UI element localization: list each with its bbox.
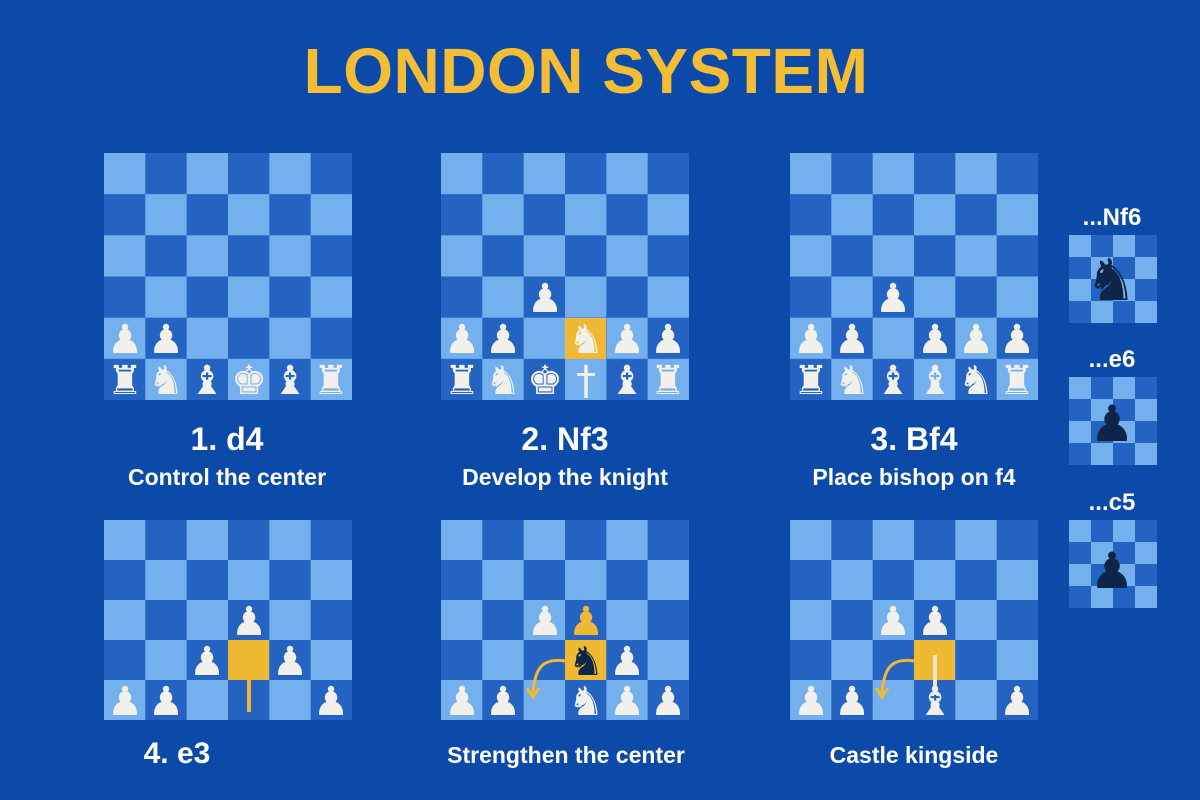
board 1: d4 bbox=[104, 153, 352, 404]
board 1: d4: ♝ bbox=[272, 358, 308, 404]
board 2: Nf3: ♟ bbox=[444, 317, 480, 363]
board 4: e3: ♟ bbox=[313, 679, 349, 725]
board 6: castle: ♝ bbox=[917, 679, 953, 725]
board 5: strengthen: ♟ bbox=[527, 599, 563, 645]
caption: castle kingside: Castle kingside bbox=[830, 742, 998, 768]
board 5: strengthen: ♟ bbox=[485, 679, 521, 725]
board 4: e3: ♟ bbox=[148, 679, 184, 725]
board 3: Bf4: ♟ bbox=[958, 317, 994, 363]
board 2: Nf3: ♟ bbox=[609, 317, 645, 363]
board 3: Bf4: ♝ bbox=[917, 358, 953, 404]
board 5: strengthen: ♞ bbox=[568, 679, 604, 725]
board 3: Bf4: ♞ bbox=[834, 358, 870, 404]
caption: develop the knight: Develop the knight bbox=[462, 464, 668, 490]
board 6: castle: ♟ bbox=[875, 599, 911, 645]
board 2: Nf3: ♝ bbox=[609, 358, 645, 404]
side: e6 bbox=[1069, 346, 1157, 465]
board 4: e3: ♟ bbox=[189, 639, 225, 685]
board 2: Nf3: ♞ bbox=[485, 358, 521, 404]
board 2: Nf3 bbox=[441, 153, 689, 404]
title: LONDON SYSTEM bbox=[304, 35, 868, 107]
board 3: Bf4: ♝ bbox=[875, 358, 911, 404]
label: 1. d4: 1. d4 bbox=[191, 421, 264, 457]
board 1: d4: ♝ bbox=[189, 358, 225, 404]
board 6: castle: ♟ bbox=[793, 679, 829, 725]
board 5: strengthen bbox=[441, 520, 689, 725]
board 4: e3: ♟ bbox=[272, 639, 308, 685]
arrow bbox=[882, 660, 914, 693]
caption: strengthen the center: Strengthen the center bbox=[447, 742, 685, 768]
board 4: e3: ♟ bbox=[107, 679, 143, 725]
board 3: Bf4: ♟ bbox=[999, 317, 1035, 363]
side: e6: ♟ bbox=[1090, 395, 1134, 453]
board 1: d4: ♞ bbox=[148, 358, 184, 404]
caption: place bishop: Place bishop on f4 bbox=[812, 464, 1016, 490]
board 3: Bf4: ♟ bbox=[834, 317, 870, 363]
board 4: e3: ♟ bbox=[231, 599, 267, 645]
board 2: Nf3: ♟ bbox=[485, 317, 521, 363]
label: 2. Nf3: 2. Nf3 bbox=[521, 421, 609, 457]
board 3: Bf4: ♟ bbox=[875, 276, 911, 322]
board 5: strengthen: ♟ bbox=[609, 639, 645, 685]
board 5: strengthen: ♟ bbox=[444, 679, 480, 725]
side: c5 bbox=[1069, 489, 1157, 608]
board 3: Bf4: ♜ bbox=[999, 358, 1035, 404]
board 3: Bf4: ♟ bbox=[793, 317, 829, 363]
board 3: Bf4: ♞ bbox=[958, 358, 994, 404]
board 2: Nf3: ♞ bbox=[568, 317, 604, 363]
side: Nf6: ...Nf6 bbox=[1083, 204, 1141, 231]
board 1: d4: ♟ bbox=[148, 317, 184, 363]
board 2: Nf3: ♚ bbox=[527, 358, 563, 404]
board 3: Bf4: ♜ bbox=[793, 358, 829, 404]
side: Nf6 bbox=[1069, 204, 1157, 323]
board 2: Nf3: † bbox=[576, 358, 596, 404]
board 5: strengthen: ♞ bbox=[568, 639, 604, 685]
board 6: castle bbox=[790, 520, 1038, 725]
label: 4. e3: 4. e3 bbox=[144, 737, 210, 770]
board 6: castle: ♟ bbox=[999, 679, 1035, 725]
board 1: d4: ♟ bbox=[107, 317, 143, 363]
side: c5: ...c5 bbox=[1089, 489, 1135, 516]
side: e6: ...e6 bbox=[1089, 346, 1135, 373]
board 2: Nf3: ♜ bbox=[650, 358, 686, 404]
board 2: Nf3: ♜ bbox=[444, 358, 480, 404]
board 1: d4: ♜ bbox=[107, 358, 143, 404]
board 2: Nf3: ♟ bbox=[650, 317, 686, 363]
side: c5: ♟ bbox=[1090, 542, 1134, 600]
arrow bbox=[533, 660, 565, 693]
board 5: strengthen: ♟ bbox=[650, 679, 686, 725]
board 5: strengthen: ♟ bbox=[609, 679, 645, 725]
caption: control the center: Control the center bbox=[128, 464, 326, 490]
board 3: Bf4: ♟ bbox=[917, 317, 953, 363]
board 1: d4: ♚ bbox=[231, 358, 267, 404]
board 1: d4: ♜ bbox=[313, 358, 349, 404]
board 2: Nf3: ♟ bbox=[527, 276, 563, 322]
board 3: Bf4 bbox=[790, 153, 1038, 404]
board 6: castle: ♟ bbox=[917, 599, 953, 645]
board 4: e3 bbox=[104, 520, 352, 725]
board 5: strengthen: ♟ bbox=[568, 599, 604, 645]
side: Nf6: ♞ bbox=[1085, 246, 1137, 314]
board 6: castle: ♟ bbox=[834, 679, 870, 725]
label: 3. Bf4: 3. Bf4 bbox=[870, 421, 958, 457]
